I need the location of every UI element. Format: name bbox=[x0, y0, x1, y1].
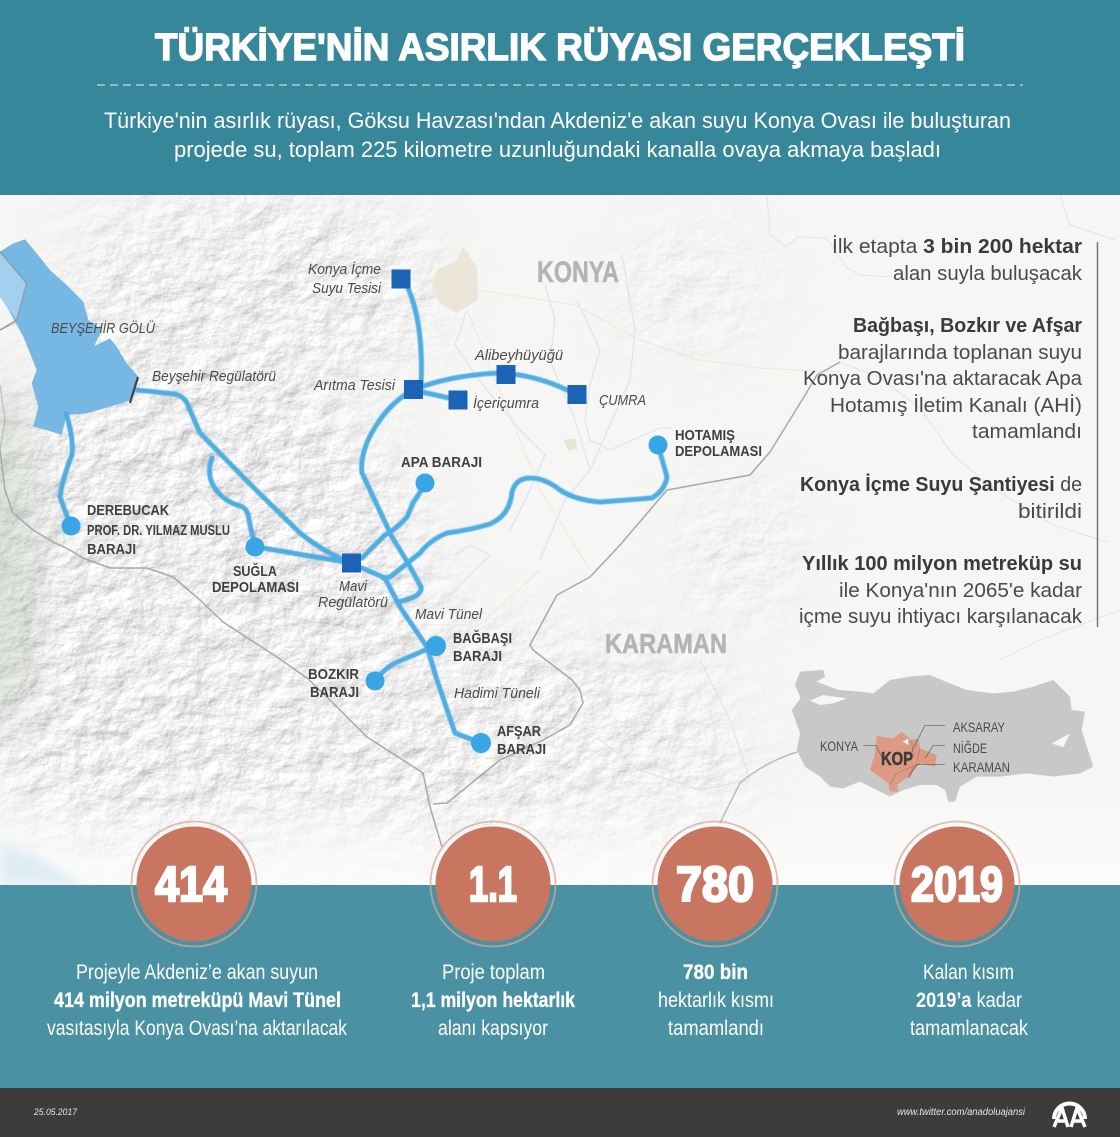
province names bbox=[537, 256, 727, 659]
dam markers bbox=[62, 436, 668, 753]
Turkey locator map bbox=[792, 670, 1093, 802]
map labels: dams: DEPOLAMASI bbox=[675, 443, 762, 460]
stat 1.1: 1,1 milyon hektarlık bbox=[411, 989, 575, 1012]
map labels: dams: DEPOLAMASI bbox=[212, 579, 299, 596]
right text column: Hotamış İletim Kanalı (AHİ) bbox=[830, 394, 1082, 417]
map labels: dams bbox=[87, 427, 762, 758]
stat 780 bbox=[652, 822, 778, 1040]
stat 2019: 2019’a kadar bbox=[916, 989, 1022, 1012]
right text column: İlk etapta 3 bin 200 hektar bbox=[832, 235, 1082, 258]
map labels: dams: BARAJI bbox=[310, 684, 359, 701]
right text column: bitirildi bbox=[1018, 501, 1082, 523]
province names: KONYA bbox=[537, 256, 619, 289]
map labels: dams: BARAJI bbox=[497, 741, 546, 758]
stat 414: 414 bbox=[155, 858, 227, 912]
right text column: içme suyu ihtiyacı karşılanacak bbox=[799, 606, 1083, 628]
header band bbox=[0, 0, 1120, 195]
Turkey locator map: KARAMAN bbox=[953, 759, 1010, 775]
stat 414: Projeyle Akdeniz’e akan suyun bbox=[76, 961, 318, 984]
regulator tick bbox=[130, 377, 138, 403]
right text column: tamamlandı bbox=[972, 421, 1082, 443]
map labels: dams: AFŞAR bbox=[497, 723, 541, 740]
map labels: facilities and tunnels: İçeriçumra bbox=[473, 395, 539, 412]
canal network bbox=[60, 288, 667, 743]
stat 780: tamamlandı bbox=[668, 1017, 764, 1040]
right text column: Bağbaşı, Bozkır ve Afşar bbox=[853, 315, 1082, 337]
map background bbox=[0, 195, 1120, 885]
stat 780: hektarlık kısmı bbox=[658, 989, 774, 1012]
map labels: dams: BARAJI bbox=[453, 648, 502, 665]
footer band: 25.05.2017 bbox=[33, 1107, 78, 1118]
right text column: alan suyla buluşacak bbox=[893, 263, 1083, 285]
stat 780: 780 bin bbox=[683, 961, 748, 984]
right text column: ile Konya'nın 2065'e kadar bbox=[839, 580, 1082, 602]
map labels: dams: SUĞLA bbox=[233, 562, 277, 580]
stat 2019 bbox=[894, 822, 1028, 1040]
right text column bbox=[799, 235, 1098, 628]
stat 780: 780 bbox=[676, 858, 754, 912]
stat 414: 414 milyon metreküpü Mavi Tünel bbox=[54, 989, 341, 1012]
right text column: Konya İçme Suyu Şantiyesi de bbox=[800, 473, 1082, 496]
stat 2019: Kalan kısım bbox=[923, 961, 1014, 984]
map labels: facilities and tunnels: Regülatörü bbox=[318, 594, 389, 611]
right text column: Yıllık 100 milyon metreküp su bbox=[802, 553, 1082, 575]
province boundaries bbox=[0, 195, 1120, 847]
Turkey locator map: KOP bbox=[881, 749, 913, 769]
stat 2019: tamamlanacak bbox=[910, 1017, 1028, 1040]
Konya city area bbox=[432, 247, 577, 451]
stat 1.1: alanı kapsıyor bbox=[438, 1017, 548, 1040]
stat 1.1: Proje toplam bbox=[442, 961, 545, 984]
map labels: dams: BARAJI bbox=[87, 541, 136, 558]
province names: KARAMAN bbox=[605, 628, 727, 659]
map labels: dams: APA BARAJI bbox=[401, 454, 482, 471]
header band: Türkiye'nin asırlık rüyası, Göksu Havzası'ndan Akdeniz'e akan suyu Konya Ovası ile buluşturan bbox=[104, 108, 1011, 133]
icon: AA logo bbox=[1054, 1103, 1085, 1127]
footer band bbox=[0, 1088, 1120, 1137]
stat 414: vasıtasıyla Konya Ovası’na aktarılacak bbox=[47, 1017, 347, 1040]
map labels: facilities and tunnels bbox=[51, 261, 646, 702]
stat 2019: 2019 bbox=[911, 858, 1003, 912]
map labels: dams: PROF. DR. YILMAZ MUSLU bbox=[87, 522, 230, 539]
stat 1.1: 1.1 bbox=[469, 858, 517, 912]
map labels: facilities and tunnels: Arıtma Tesisi bbox=[313, 377, 396, 394]
map labels: facilities and tunnels: Hadimi Tüneli bbox=[454, 685, 541, 702]
map labels: facilities and tunnels: Konya İçme bbox=[308, 261, 381, 278]
map labels: facilities and tunnels: ÇUMRA bbox=[599, 392, 646, 409]
map labels: facilities and tunnels: Suyu Tesisi bbox=[312, 280, 382, 297]
right text column: barajlarında toplanan suyu bbox=[838, 342, 1082, 364]
map labels: facilities and tunnels: Alibeyhüyüğü bbox=[474, 347, 564, 364]
header band: projede su, toplam 225 kilometre uzunluğundaki kanalla ovaya akmaya başladı bbox=[174, 137, 941, 162]
stat 414 bbox=[47, 822, 347, 1040]
Turkey locator map: NİĞDE bbox=[953, 739, 987, 756]
rivers and roads bbox=[165, 255, 840, 790]
footer band: www.twitter.com/anadoluajansi bbox=[897, 1107, 1026, 1118]
facility markers bbox=[342, 270, 586, 572]
map labels: facilities and tunnels: Mavi Tünel bbox=[415, 606, 483, 623]
stat 1.1 bbox=[411, 822, 575, 1040]
statistics band bbox=[0, 885, 1120, 1088]
map labels: dams: BOZKIR bbox=[308, 666, 359, 683]
map labels: dams: HOTAMIŞ bbox=[675, 427, 735, 444]
map labels: dams: BAĞBAŞI bbox=[453, 629, 512, 647]
right text column: Konya Ovası'na aktaracak Apa bbox=[803, 368, 1083, 390]
Turkey locator map: KONYA bbox=[820, 738, 859, 754]
Beyşehir lake bbox=[0, 239, 138, 435]
title: TÜRKİYE'NİN ASIRLIK RÜYASI GERÇEKLEŞTİ bbox=[155, 26, 965, 69]
map labels: facilities and tunnels: BEYŞEHİR GÖLÜ bbox=[51, 319, 155, 337]
map labels: facilities and tunnels: Beyşehir Regülatörü bbox=[152, 368, 277, 385]
map labels: facilities and tunnels: Mavi bbox=[339, 578, 368, 595]
Turkey locator map: AKSARAY bbox=[953, 719, 1006, 735]
map labels: dams: DEREBUCAK bbox=[87, 502, 169, 519]
